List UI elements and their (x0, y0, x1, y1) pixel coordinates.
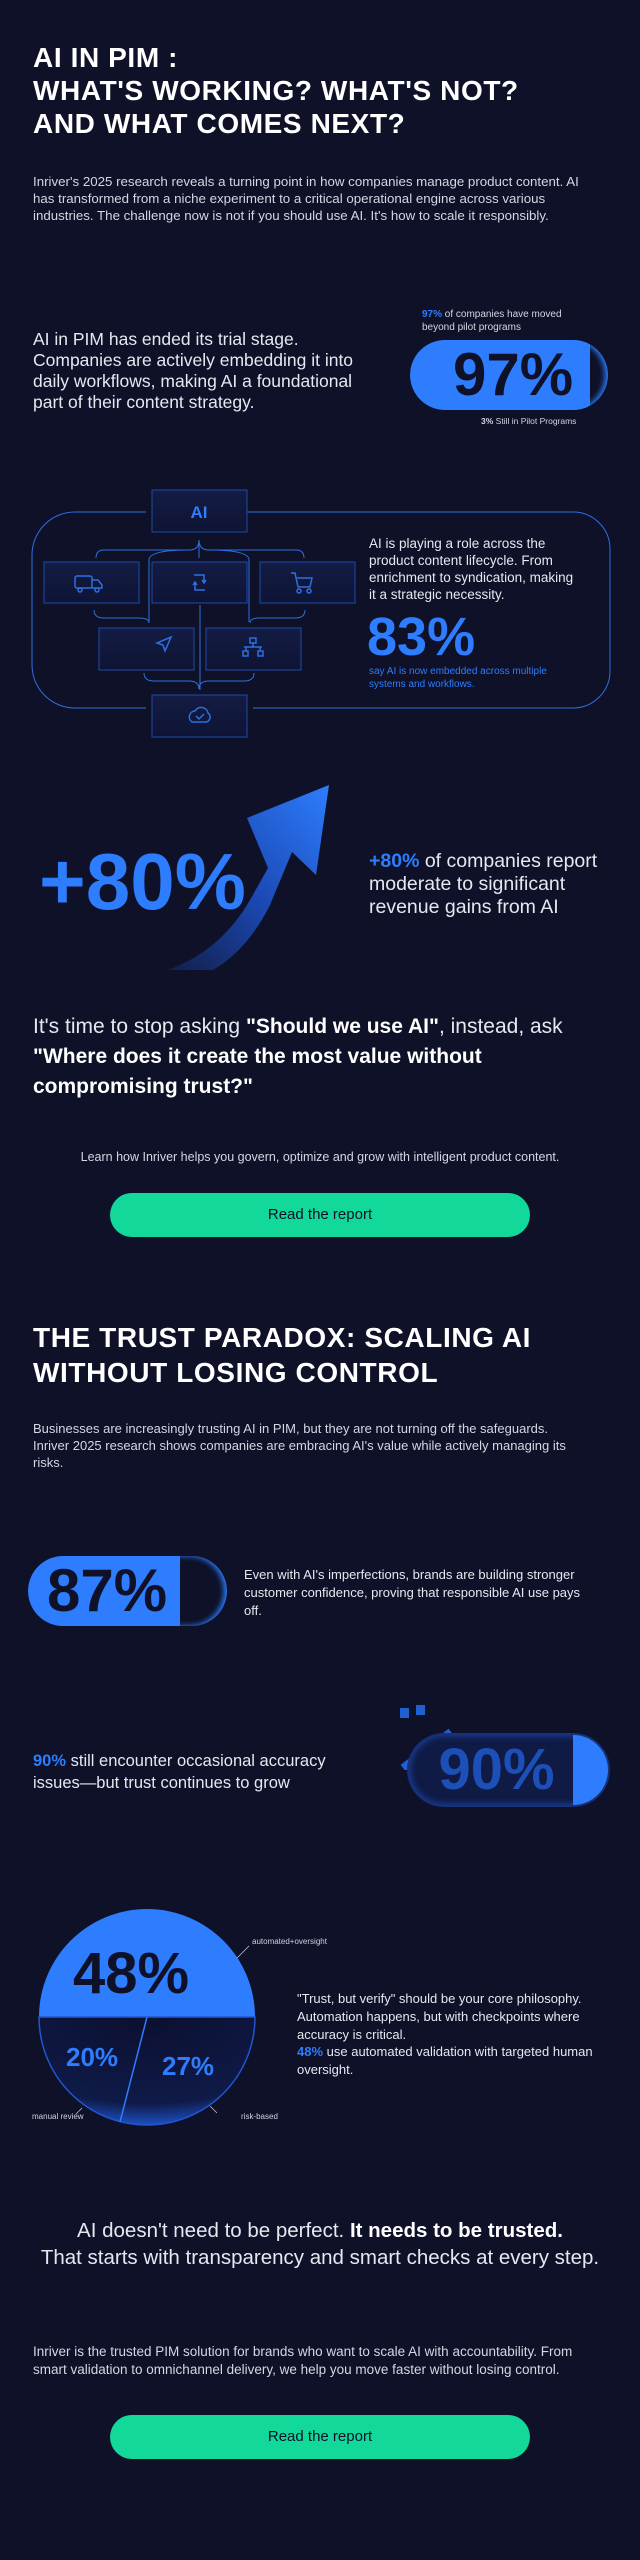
icon: growth arrow (168, 785, 329, 970)
pill: 97%: 97% (453, 341, 573, 408)
pill: 87%: 87% (47, 1557, 167, 1624)
text: trust but verify (297, 1991, 593, 2077)
diagram: AI workflow: AI (190, 503, 208, 522)
label: manual review: manual review (32, 2112, 84, 2121)
stat label 97%: 97% of companies have moved (422, 309, 562, 320)
text: trust but verify: 48% use automated validation with targeted human oversight. (297, 2044, 593, 2077)
intro paragraph: Inriver's 2025 research reveals a turning point in how companies manage product content. AI has transformed from a niche experiment to a critical operational engine across various industries. The challenge now is not if you should use AI. It's how to scale it responsibly. (33, 174, 579, 223)
paragraph closing: Inriver is the trusted PIM solution for brands who want to scale AI with accountability. From smart validation to omnichannel delivery, we help you move faster without losing control. (33, 2344, 572, 2376)
label: automated+oversight: automated+oversight (252, 1937, 327, 1946)
callout question: It's time to stop asking "Should we use AI", instead, ask "Where does it create the most value without compromising trust?" (33, 1015, 563, 1098)
paragraph trust: Businesses are increasingly trusting AI in PIM, but they are not turning off the safeguards. Inriver 2025 research shows companies are embracing AI's value while actively managing its risks. (33, 1421, 566, 1470)
pill: 90% (400, 1705, 610, 1807)
title: WHAT'S WORKING? WHAT'S NOT? (33, 75, 519, 106)
text: 90%: 90% still encounter occasional accuracy issues—but trust continues to grow (33, 1752, 326, 1792)
stat label 3%: 3% Still in Pilot Programs (481, 416, 576, 426)
quote (41, 2219, 599, 2269)
pill: 87% (28, 1556, 227, 1626)
text: 87%: Even with AI's imperfections, brands are building stronger customer confidence, proving that responsible AI use pays off. (244, 1567, 580, 1618)
quote: That starts with transparency and smart checks at every step. (41, 2246, 599, 2269)
quote: AI doesn't need to be perfect. It needs to be trusted. (77, 2219, 563, 2242)
stat caption 83%: say AI is now embedded across multiple (369, 666, 547, 677)
button 2: Read the report (268, 2428, 372, 2445)
text: learn how: Learn how Inriver helps you govern, optimize and grow with intelligent product content. (81, 1150, 559, 1164)
label: risk-based: risk-based (241, 2112, 278, 2121)
button 2 (110, 2415, 530, 2459)
stat label 97%: beyond pilot programs (422, 322, 521, 333)
pie chart (38, 1909, 256, 2126)
pie value 20%: 20% (66, 2042, 118, 2072)
text: trial stage: AI in PIM has ended its trial stage. Companies are actively embedding it into daily workflows, making AI a foundational part of their content strategy. (33, 329, 353, 412)
pie value 48%: 48% (73, 1941, 189, 2006)
button 1: Read the report (268, 1206, 372, 1223)
stat: 83%: 83% (367, 607, 475, 667)
text: trust but verify: "Trust, but verify" should be your core philosophy. Automation happens, but with checkpoints where accuracy is critical. (297, 1991, 582, 2042)
pill: 90%: 90% (438, 1737, 555, 1802)
heading 2 (33, 1322, 531, 1388)
pie value 27%: 27% (162, 2051, 214, 2081)
text: lifecycle: AI is playing a role across the product content lifecycle. From enrichment to syndication, making it a strategic necessity. (369, 536, 573, 602)
title: AND WHAT COMES NEXT? (33, 108, 405, 139)
icon: decorative marks (400, 1705, 452, 1770)
stat label 97% (422, 309, 562, 333)
heading 2: THE TRUST PARADOX: SCALING AI (33, 1322, 531, 1353)
diagram: AI workflow (32, 490, 610, 738)
text: revenue gains: +80% of companies report moderate to significant revenue gains from AI (369, 850, 597, 918)
stat caption 83%: systems and workflows. (369, 679, 475, 690)
title: AI IN PIM : (33, 42, 178, 73)
stat caption 83% (369, 666, 547, 690)
title (33, 42, 519, 139)
stat: +80%: +80% (39, 837, 246, 926)
pill: 97% (410, 340, 608, 410)
heading 2: WITHOUT LOSING CONTROL (33, 1357, 438, 1388)
button 1 (110, 1193, 530, 1237)
